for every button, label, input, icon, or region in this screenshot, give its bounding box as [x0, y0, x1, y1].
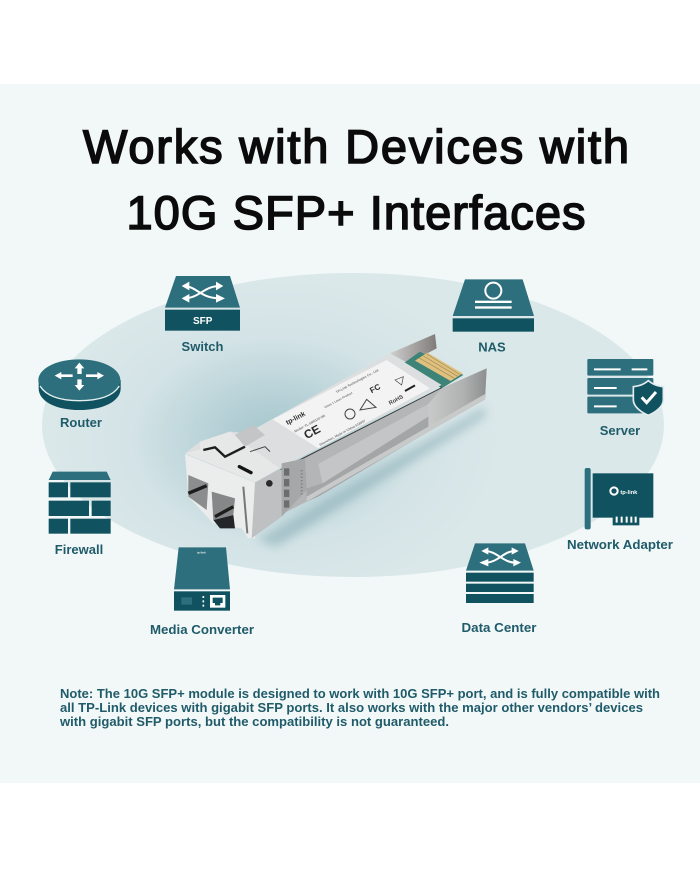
- product label: RoHS: [388, 394, 405, 407]
- Data Center: Data Center: [462, 620, 536, 635]
- top face: [185, 353, 442, 482]
- front latch: [185, 425, 280, 482]
- icon: switch: SFP: [193, 316, 213, 327]
- product label: Shenzhen, Made in China 518057: [319, 419, 366, 447]
- Router: [38, 359, 121, 430]
- front face with ports: [185, 454, 255, 538]
- product label: [273, 360, 430, 448]
- Router: Router: [60, 415, 102, 430]
- note text: [59, 687, 660, 729]
- NAS: NAS: [478, 340, 506, 354]
- Media Converter: Media Converter: [150, 622, 254, 637]
- soft shadow: [257, 407, 485, 547]
- Firewall: [49, 472, 111, 557]
- Network Adapter: Network Adapter: [567, 537, 673, 552]
- Data Center: [462, 543, 536, 635]
- Network Adapter: [567, 468, 673, 552]
- title: [83, 120, 629, 239]
- Server: Server: [600, 423, 640, 438]
- product label: FC: [368, 382, 382, 395]
- background ellipse: [42, 273, 664, 577]
- product label: Model: TL-SM5110-SR: [294, 413, 327, 434]
- icon: NAS: [453, 279, 534, 332]
- circuit board contacts: [403, 352, 463, 388]
- icon: data center: [466, 543, 534, 603]
- icon: router: [38, 359, 121, 410]
- product label: TP-Link Technologies Co., Ltd.: [335, 368, 380, 394]
- icon: server with shield: [587, 359, 663, 415]
- product label: Class 1 Laser Product: [324, 391, 353, 409]
- icon: network adapter: tp-link: [620, 490, 638, 496]
- Switch: [165, 276, 240, 354]
- product label: tp-link: [285, 411, 307, 427]
- Switch: Switch: [182, 339, 224, 354]
- SFP+ module photo: [185, 334, 487, 547]
- title: 10G SFP+ Interfaces: [126, 186, 586, 239]
- icon: media converter: tp-link: [197, 550, 206, 554]
- note text: with gigabit SFP ports, but the compatibility is not guaranteed.: [59, 715, 449, 729]
- note text: Note: The 10G SFP+ module is designed to work with 10G SFP+ port, and is fully compatible with: [60, 687, 660, 701]
- NAS: [453, 279, 534, 354]
- icon: firewall: [49, 472, 111, 534]
- title: Works with Devices with: [83, 120, 629, 173]
- Firewall: Firewall: [55, 542, 103, 557]
- Media Converter: [150, 547, 254, 637]
- side wall: [280, 368, 487, 515]
- note text: all TP-Link devices with gigabit SFP ports. It also works with the major other vendors’ devices: [60, 701, 643, 715]
- product label: CE: [301, 422, 323, 442]
- rear inner wall: [390, 334, 437, 363]
- Server: [587, 359, 663, 438]
- front side plate: [252, 458, 307, 538]
